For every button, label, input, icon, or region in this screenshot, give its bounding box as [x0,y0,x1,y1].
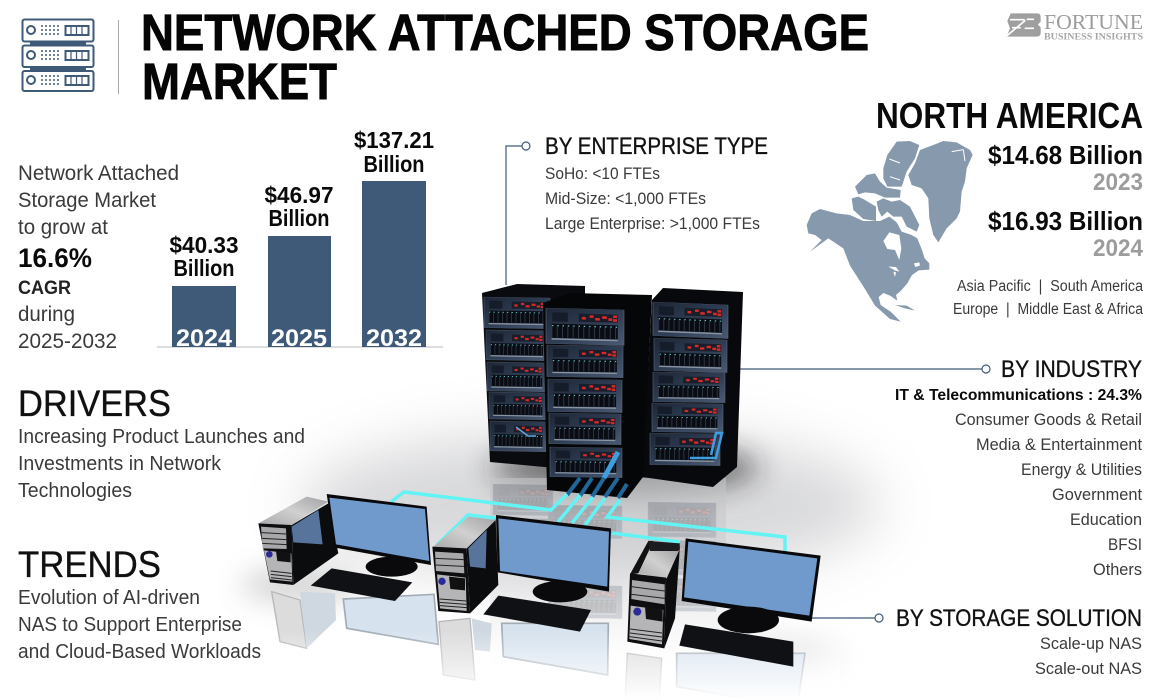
panel: North America market [876,95,1144,318]
panel: by industry: Energy & Utilities [1021,460,1142,479]
header divider [118,20,120,94]
bar 2032: 2032 [366,325,422,352]
panel: by enterprise type: SoHo: <10 FTEs [545,164,660,183]
panel: North America market: $16.93 Billion [988,206,1143,236]
panel: by industry: BY INDUSTRY [1001,356,1142,383]
computer 1 [258,494,431,601]
mainland [807,209,929,322]
bar 2025: Billion [268,205,330,231]
panel: North America market: 2023 [1093,169,1143,196]
panel: drivers: Investments in Network [18,452,222,475]
server racks [482,284,743,498]
panel: drivers: Increasing Product Launches and [18,425,305,448]
panel: by industry: Others [1093,560,1142,579]
panel: trends: TRENDS [18,544,161,585]
panel: drivers [18,383,305,502]
panel: North America market: Asia Pacific | South America [957,278,1143,295]
bar 2025: 2025 [271,325,327,352]
panel: North America market: $14.68 Billion [988,140,1143,170]
bar 2025 [264,182,334,352]
bar 2024: 2024 [176,325,233,352]
panel: trends: NAS to Support Enterprise [18,613,242,636]
middle rack [543,293,652,498]
Ellesmere island [883,141,919,187]
panel: trends: Evolution of AI-driven [18,586,200,609]
reflection: computer 3 [625,653,805,700]
panel: drivers: Technologies [18,479,132,502]
logo: Fortune Business Insights: FORTUNE [1044,10,1143,34]
computer 2 [432,515,611,632]
right rack [642,288,743,487]
bar 2032 [354,127,434,352]
panel: by industry: BFSI [1108,535,1142,554]
map: North America [807,141,973,322]
panel: by storage solution: Scale-up NAS [1040,634,1142,653]
connector: industry [738,365,990,373]
text: CAGR summary: Storage Market [18,189,156,212]
floor shadow [240,430,880,673]
computer reflections [272,592,805,700]
panel: North America market: Europe | Middle East & Africa [953,301,1143,318]
text: CAGR summary: during [18,303,75,326]
reflection: computer 1 [272,592,438,648]
rack reflections [490,478,726,668]
panel: by industry: Consumer Goods & Retail [955,410,1142,429]
Greenland [908,141,973,242]
text: CAGR summary: CAGR [18,278,71,299]
logo: Fortune Business Insights [1005,10,1143,42]
connector: storage solution [812,614,883,622]
text: CAGR summary: 16.6% [18,243,92,273]
bar 2024: $40.33 [170,232,238,258]
Hudson Bay and lakes [883,232,920,277]
panel: by enterprise type: Mid-Size: <1,000 FTEs [545,189,706,208]
panel: by industry: IT & Telecommunications : 24.3% [895,387,1142,404]
panel: drivers: DRIVERS [18,383,171,424]
title [141,4,869,110]
text: CAGR summary [18,162,179,353]
panel: North America market: 2024 [1093,235,1144,262]
title: NETWORK ATTACHED STORAGE [141,4,869,61]
bar 2025: $46.97 [264,182,334,208]
title: MARKET [142,53,337,110]
panel: trends: and Cloud-Based Workloads [18,640,261,663]
bar chart: market size [157,127,443,352]
panel: by industry: Education [1070,510,1142,529]
bar 2024: Billion [174,255,234,281]
left rack [482,284,585,468]
bar 2032: $137.21 [354,127,434,153]
fjords [889,150,965,180]
panel: by enterprise type: Large Enterprise: >1,000 FTEs [545,214,760,233]
reflection: computer 2 [439,618,608,680]
panel: by industry: Media & Entertainment [976,435,1142,454]
text: CAGR summary: to grow at [18,216,108,239]
Arctic islands [855,173,901,198]
panel: by enterprise type [545,133,768,233]
text: CAGR summary: Network Attached [18,162,179,185]
connector: enterprise type [506,142,530,285]
bar 2024 [170,232,238,352]
bar 2032: Billion [364,151,424,177]
Baffin island [877,198,919,232]
cyan network lines [323,492,785,557]
text: CAGR summary: 2025-2032 [18,330,117,353]
computer 3 [627,538,821,667]
panel: by storage solution [896,605,1142,678]
Cuba [895,305,915,311]
reflection fade [268,630,840,700]
panel: trends [18,544,261,663]
icon: server stack [22,20,94,91]
panel: by industry [895,356,1142,579]
panel: by storage solution: Scale-out NAS [1035,659,1142,678]
logo: Fortune Business Insights: BUSINESS INSIGHTS [1044,32,1143,42]
logo mark [1005,13,1041,38]
panel: by enterprise type: BY ENTERPRISE TYPE [545,133,768,160]
panel: by industry: Government [1052,485,1142,504]
Victoria island [852,197,876,221]
